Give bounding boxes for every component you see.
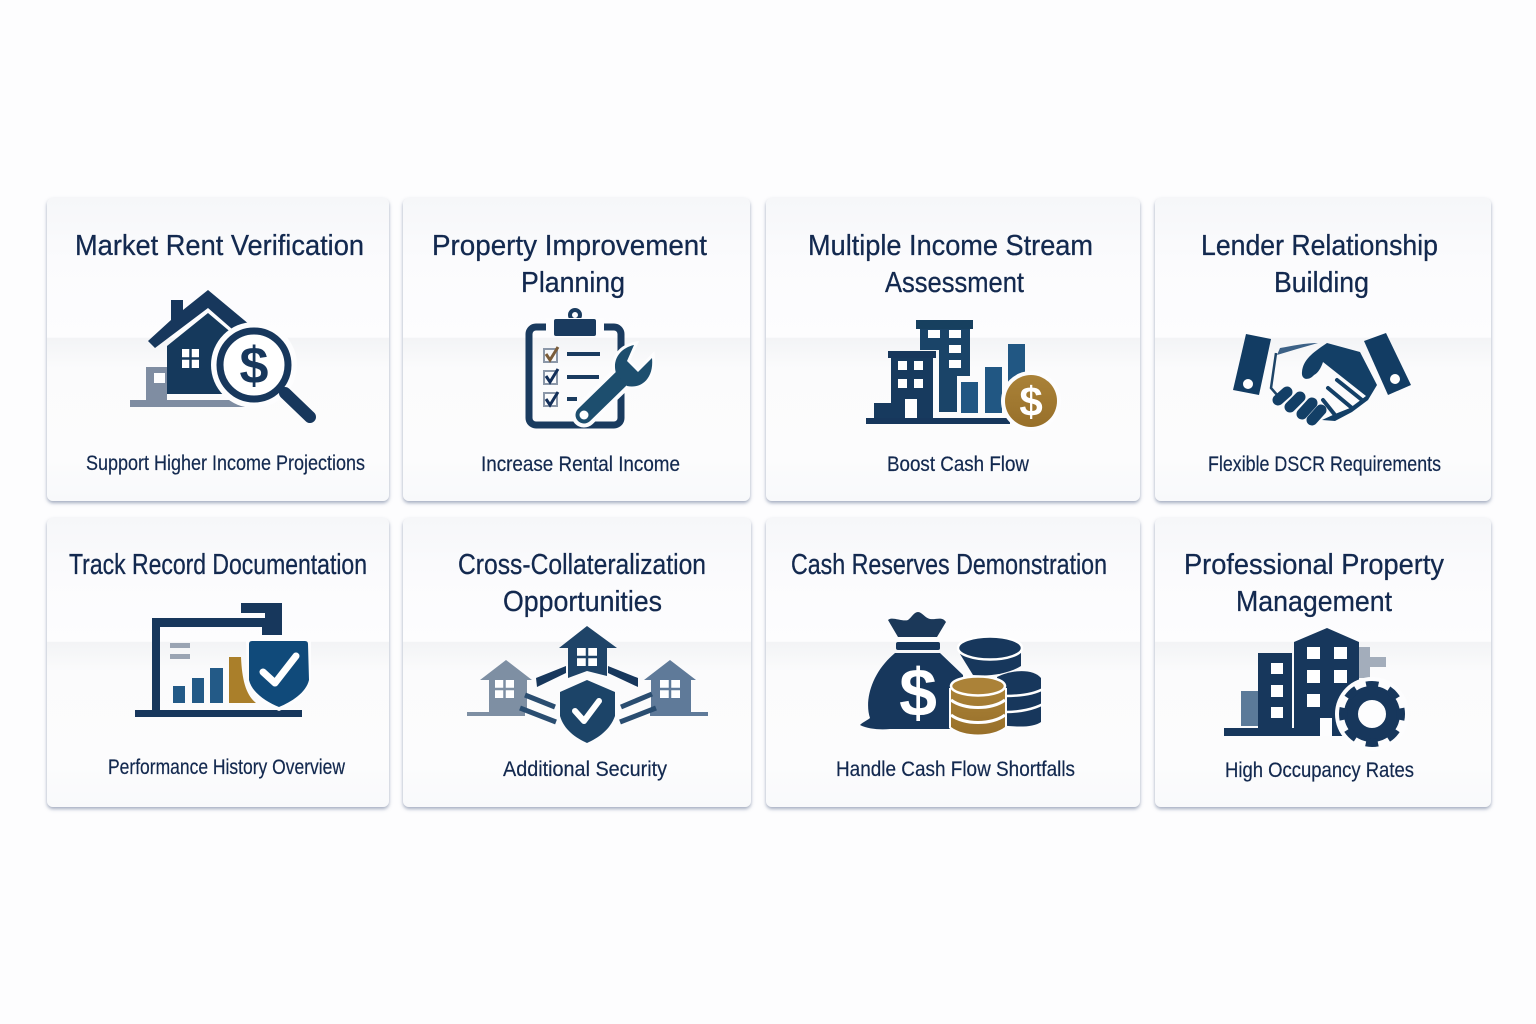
- heading: Lender Relationship Building: Building: [1274, 267, 1369, 299]
- caption: Additional Security: Additional Security: [503, 758, 667, 781]
- icon: buildings, bars and coin: $: [1019, 378, 1043, 425]
- icon: connected houses with shield: [467, 626, 708, 743]
- heading: Multiple Income Stream Assessment: Multiple Income Stream: [808, 230, 1093, 262]
- panel: Professional Property Management: [1155, 518, 1491, 807]
- heading: Cash Reserves Demonstration: Cash Reserves Demonstration: [791, 549, 1107, 581]
- heading: Multiple Income Stream Assessment: [808, 230, 1093, 299]
- panel: Market Rent Verification: [47, 198, 389, 501]
- heading: Cross-Collateralization Opportunities: Opportunities: [503, 586, 662, 618]
- heading: Cross-Collateralization Opportunities: [458, 549, 706, 618]
- heading: Professional Property Management: Professional Property: [1184, 549, 1444, 581]
- heading: Property Improvement Planning: [432, 230, 707, 299]
- panel: Track Record Documentation: [47, 518, 389, 807]
- icon: handshake: [1233, 333, 1411, 421]
- caption: Flexible DSCR Requirements: Flexible DSCR Requirements: [1208, 453, 1441, 476]
- heading: Lender Relationship Building: Lender Relationship: [1201, 230, 1438, 262]
- heading: Multiple Income Stream Assessment: Assessment: [885, 267, 1024, 299]
- panel: Cash Reserves Demonstration: [766, 518, 1140, 807]
- heading: Professional Property Management: Management: [1236, 586, 1392, 618]
- icon: money bag with coin stacks: $: [899, 655, 937, 731]
- heading: Lender Relationship Building: [1201, 230, 1438, 299]
- heading: Property Improvement Planning: Planning: [521, 267, 625, 299]
- caption: Handle Cash Flow Shortfalls: Handle Cash Flow Shortfalls: [836, 758, 1075, 781]
- icon: buildings with gear: [1224, 628, 1409, 751]
- icon: house with magnifying glass: [130, 290, 310, 417]
- heading: Professional Property Management: [1184, 549, 1444, 618]
- panel: Lender Relationship Building: [1155, 198, 1491, 501]
- caption: High Occupancy Rates: High Occupancy Rates: [1225, 759, 1414, 782]
- panel: Cross-Collateralization Opportunities: [403, 518, 751, 807]
- panel: Property Improvement Planning: [403, 198, 750, 501]
- caption: Increase Rental Income: Increase Rental Income: [481, 453, 680, 476]
- icon: chart with shield: [135, 603, 311, 717]
- panel: Multiple Income Stream Assessment: [766, 198, 1140, 501]
- heading: Track Record Documentation: Track Record Documentation: [69, 549, 367, 581]
- icon: money bag with coin stacks: [860, 612, 1043, 736]
- caption: Support Higher Income Projections: Support Higher Income Projections: [86, 452, 365, 475]
- icon: buildings, bars and coin: [866, 320, 1061, 431]
- caption: Boost Cash Flow: Boost Cash Flow: [887, 453, 1030, 476]
- heading: Cross-Collateralization Opportunities: Cross-Collateralization: [458, 549, 706, 581]
- heading: Market Rent Verification: Market Rent Verification: [75, 230, 364, 262]
- caption: Performance History Overview: Performance History Overview: [108, 756, 346, 779]
- icon: house with magnifying glass: $: [240, 337, 269, 395]
- heading: Property Improvement Planning: Property Improvement: [432, 230, 707, 262]
- icon: clipboard with wrench: [529, 310, 652, 425]
